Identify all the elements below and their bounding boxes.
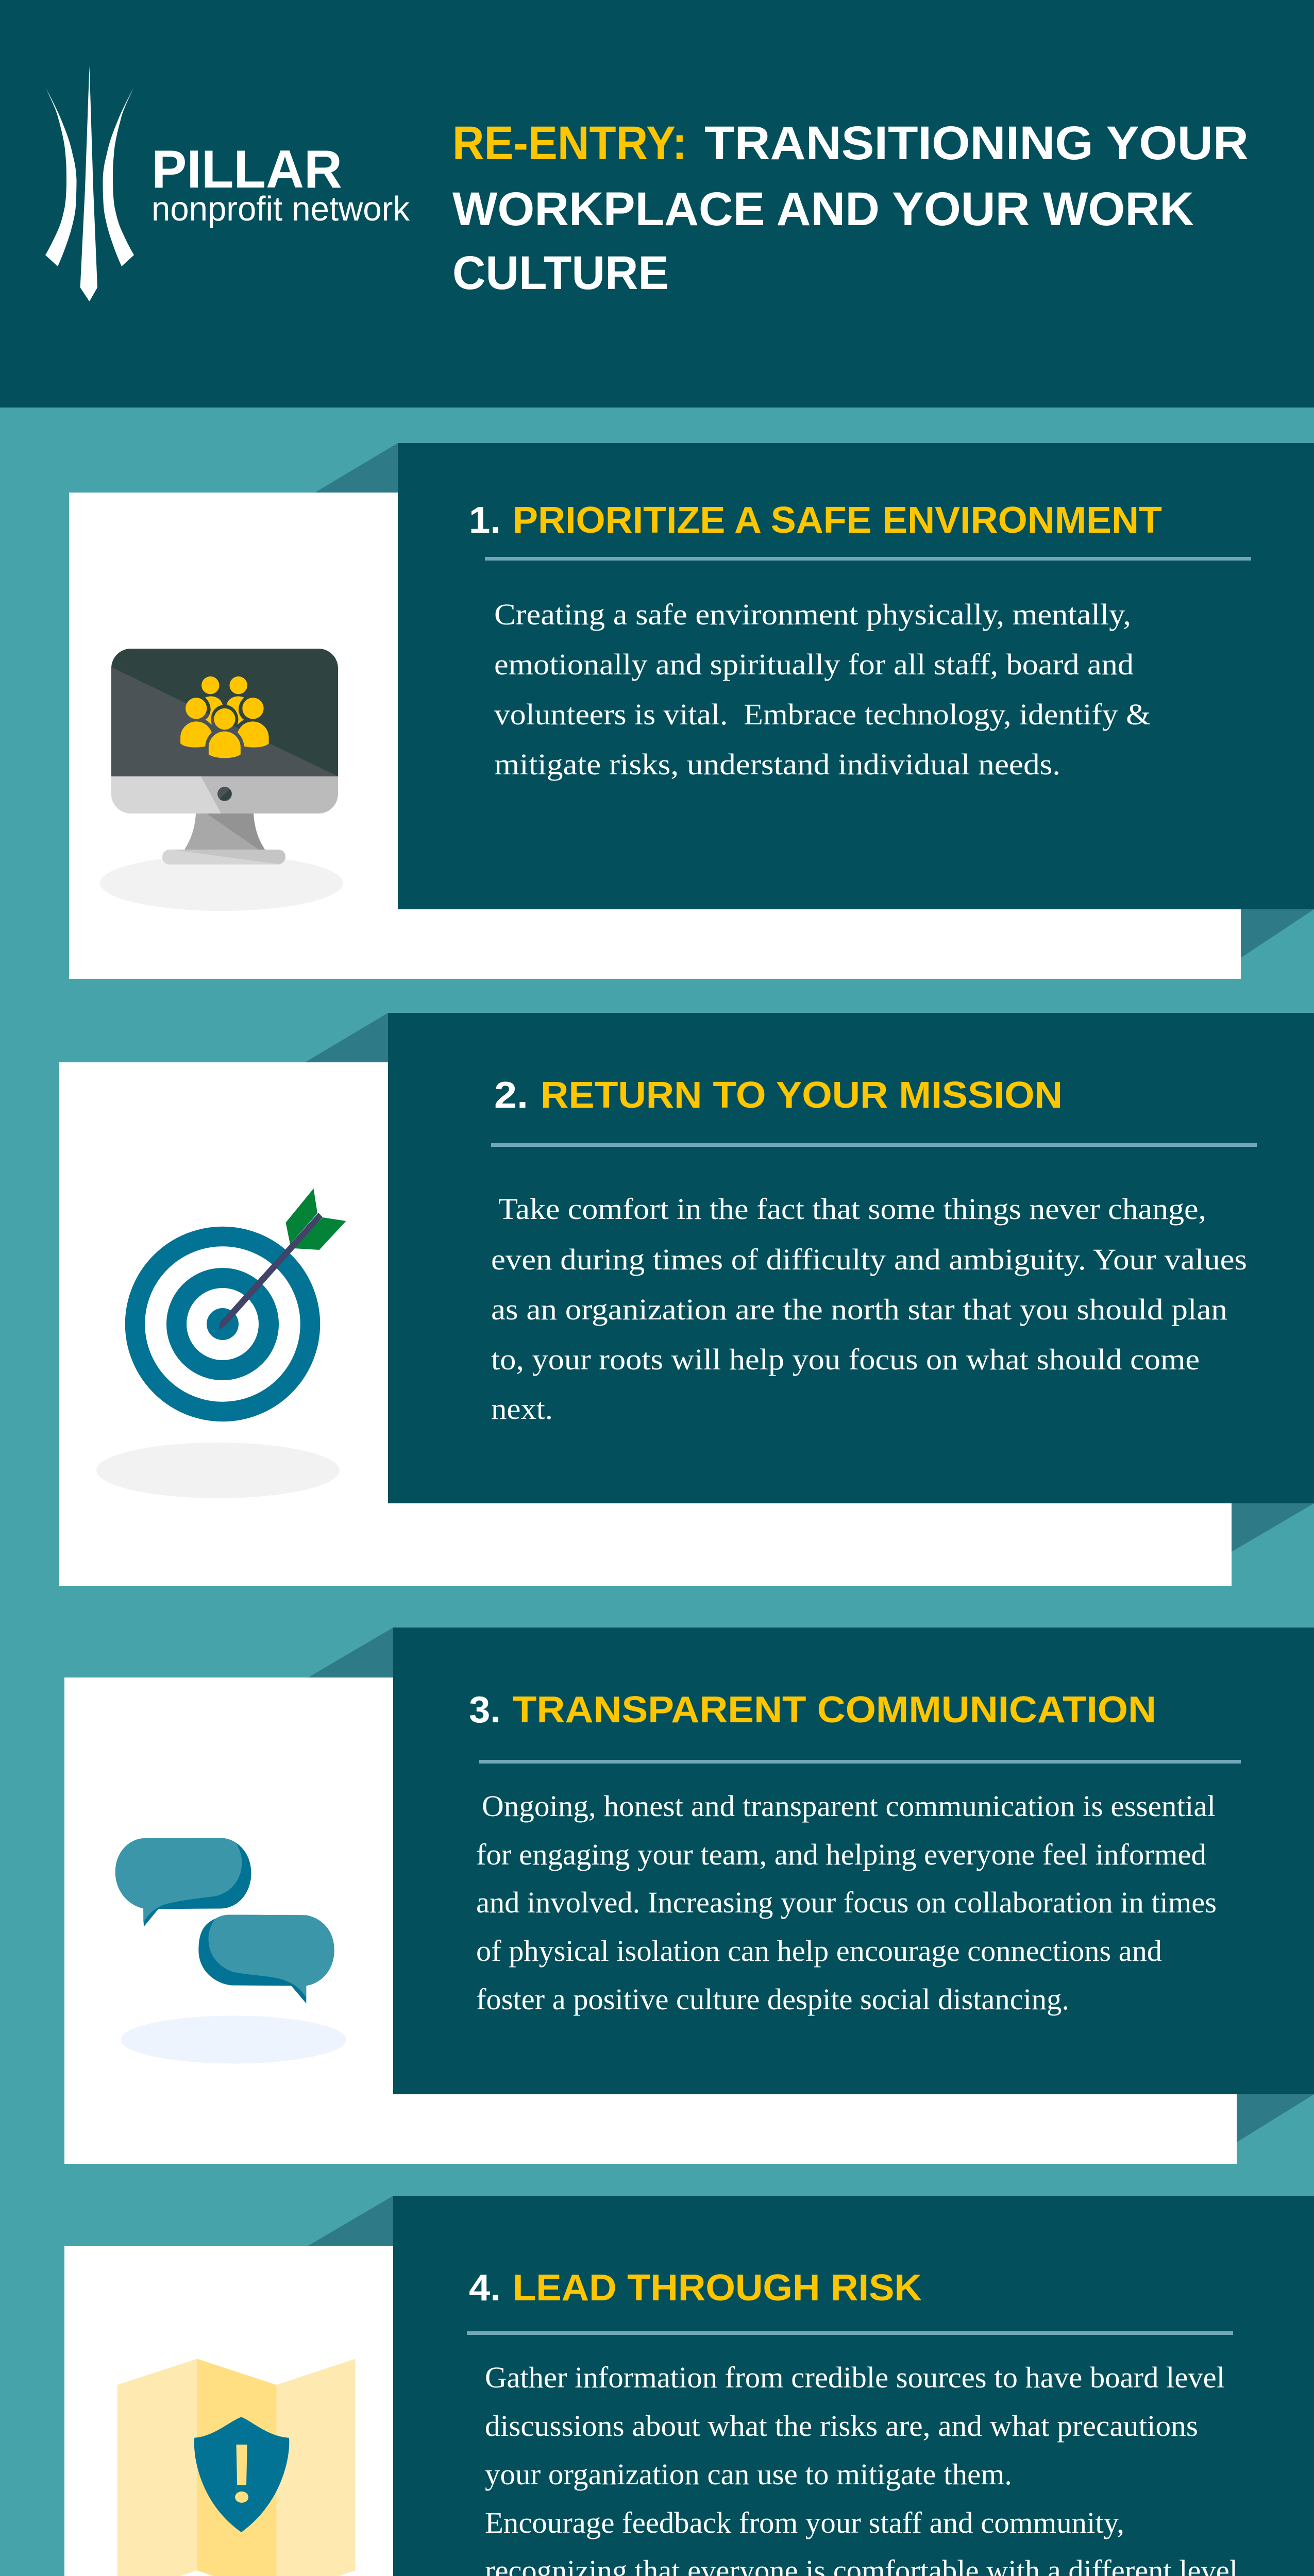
icon: group of people bbox=[180, 676, 269, 758]
body text 1: emotionally and spiritually for all staff, board and bbox=[494, 648, 1134, 681]
body text 2 bbox=[491, 1192, 1247, 1426]
body text 2: Take comfort in the fact that some things never change, bbox=[498, 1192, 1206, 1226]
title: RE-ENTRY: bbox=[452, 117, 687, 170]
panel: 4 lead through risk bbox=[64, 2196, 1314, 2576]
body text 3: and involved. Increasing your focus on collaboration in times bbox=[476, 1886, 1217, 1919]
body text 3: for engaging your team, and helping everyone feel informed bbox=[476, 1838, 1206, 1871]
heading 2: RETURN TO YOUR MISSION bbox=[541, 1075, 1063, 1116]
icon: map with warning shield bbox=[117, 2359, 355, 2576]
white card bbox=[69, 493, 1241, 979]
body text 3 bbox=[476, 1789, 1217, 2016]
heading 3: TRANSPARENT COMMUNICATION bbox=[513, 1689, 1156, 1731]
title: TRANSITIONING YOUR bbox=[704, 117, 1249, 170]
body text 1: Creating a safe environment physically, mentally, bbox=[494, 598, 1131, 631]
fold top-left bbox=[308, 1628, 393, 1677]
fold bottom-right bbox=[1232, 1503, 1314, 1552]
heading 1: 1. bbox=[469, 500, 501, 541]
logo mark: three blades bbox=[45, 66, 134, 301]
fold top-left bbox=[315, 443, 398, 493]
icon: speech bubbles bbox=[115, 1838, 346, 2063]
fold bottom-right bbox=[1237, 2094, 1314, 2142]
panel: 1 prioritize a safe environment bbox=[69, 443, 1314, 979]
panel: 3 transparent communication bbox=[64, 1628, 1314, 2164]
body text 2: as an organization are the north star that you should plan bbox=[491, 1293, 1227, 1326]
dark text panel bbox=[398, 443, 1314, 909]
heading 4: LEAD THROUGH RISK bbox=[513, 2267, 922, 2309]
dark text panel bbox=[393, 1628, 1314, 2094]
body text 3: of physical isolation can help encourage connections and bbox=[476, 1934, 1162, 1968]
white card bbox=[59, 1062, 1232, 1586]
body text 4 bbox=[485, 2361, 1238, 2576]
dark text panel bbox=[393, 2196, 1314, 2576]
body text 4: Gather information from credible sources to have board level bbox=[485, 2361, 1225, 2394]
logo wordmark: PILLAR: PILLAR bbox=[151, 140, 342, 199]
body text 4: discussions about what the risks are, and what precautions bbox=[485, 2409, 1198, 2443]
body text 2: even during times of difficulty and ambiguity. Your values bbox=[491, 1243, 1247, 1276]
body text 4: your organization can use to mitigate them. bbox=[485, 2458, 1012, 2491]
white card bbox=[64, 1677, 1237, 2164]
body text 3: foster a positive culture despite social distancing. bbox=[476, 1982, 1069, 2016]
heading 4: 4. bbox=[469, 2267, 501, 2309]
heading 1: PRIORITIZE A SAFE ENVIRONMENT bbox=[513, 500, 1162, 541]
panel: 2 return to your mission bbox=[59, 1013, 1314, 1586]
fold top-left bbox=[305, 1013, 388, 1062]
title bbox=[452, 117, 1249, 299]
fold bottom-right bbox=[1241, 909, 1314, 958]
body text 4: Encourage feedback from your staff and community, bbox=[485, 2506, 1124, 2539]
logo tagline: nonprofit network: nonprofit network bbox=[151, 190, 410, 228]
fold top-left bbox=[308, 2196, 393, 2246]
header band bbox=[0, 0, 1314, 408]
white card bbox=[64, 2246, 1237, 2576]
body text 3: Ongoing, honest and transparent communication is essential bbox=[482, 1789, 1216, 1823]
body text 1: volunteers is vital. Embrace technology, identify & bbox=[494, 698, 1151, 731]
heading 3: 3. bbox=[469, 1689, 501, 1731]
heading 2: 2. bbox=[494, 1075, 528, 1116]
body text 2: to, your roots will help you focus on what should come bbox=[491, 1343, 1200, 1376]
title: WORKPLACE AND YOUR WORK bbox=[452, 183, 1194, 235]
logo: Pillar nonprofit network bbox=[45, 66, 410, 301]
body text 1 bbox=[494, 598, 1151, 781]
body text 1: mitigate risks, understand individual needs. bbox=[494, 748, 1060, 781]
icon: computer monitor with people bbox=[100, 649, 343, 911]
title: CULTURE bbox=[452, 247, 669, 299]
icon: target with arrow bbox=[96, 1189, 346, 1498]
body text 2: next. bbox=[491, 1392, 553, 1426]
dark text panel bbox=[388, 1013, 1314, 1503]
